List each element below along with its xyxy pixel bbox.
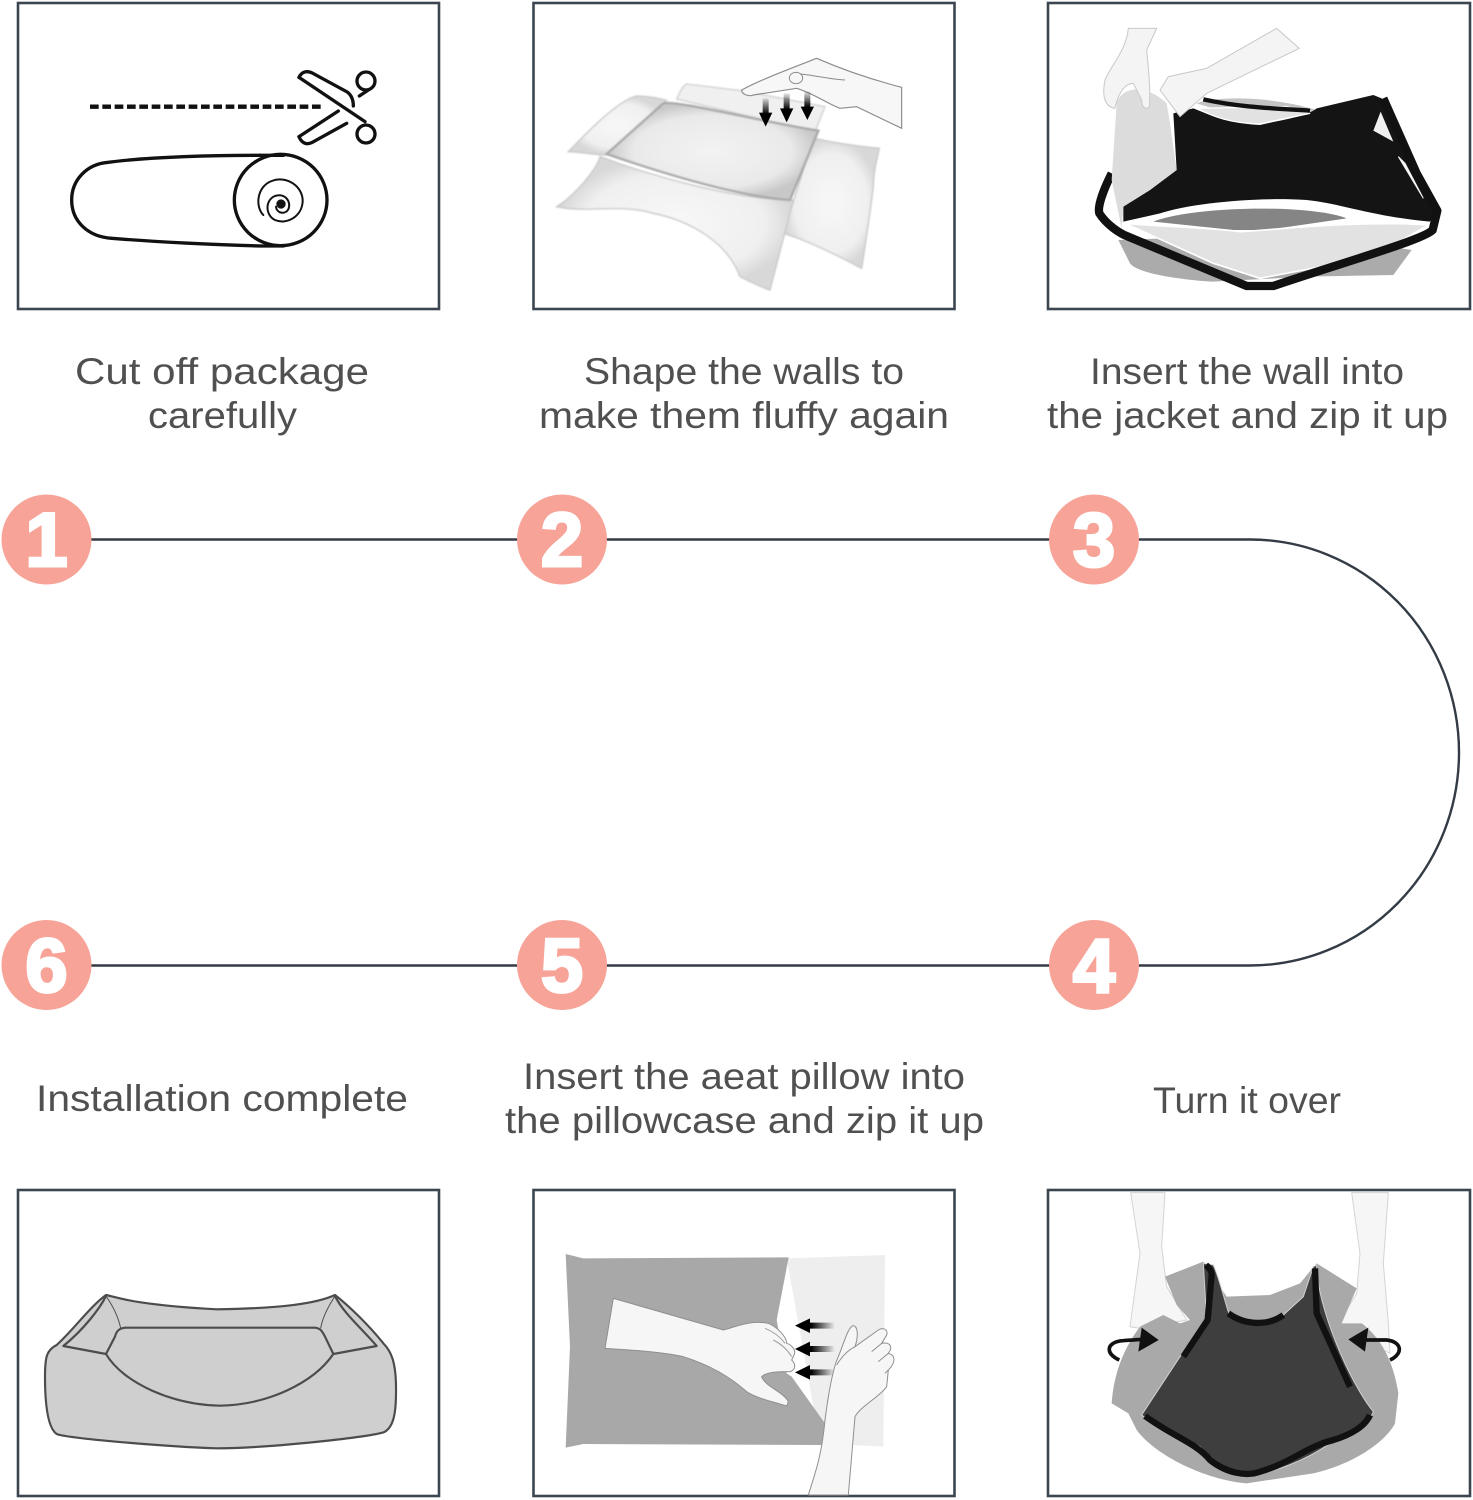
panel: step 6 finished bed	[18, 1190, 439, 1496]
caption: step 1: Cut off package	[75, 351, 369, 392]
illustration: jacket with wall and hands	[1099, 28, 1437, 286]
illustration: pillow and hands	[566, 1254, 894, 1495]
illustration: turning the cover	[1109, 1193, 1399, 1483]
panel: step 4 turn over	[1048, 1190, 1470, 1496]
caption: step 4: Turn it over	[1153, 1080, 1341, 1121]
icon: hand	[742, 58, 902, 128]
step marker 5	[517, 920, 607, 1010]
step marker 6	[2, 920, 92, 1010]
caption: step 3	[1047, 351, 1448, 436]
panel: step 3 insert wall	[1048, 3, 1470, 309]
step marker 4	[1049, 920, 1139, 1010]
icon: scissors and dashed cut line	[90, 72, 375, 144]
caption: step 2: Shape the walls to	[584, 351, 904, 392]
wall panel	[1112, 90, 1177, 228]
icon: hands	[1104, 28, 1299, 117]
icon: arrows	[795, 1318, 835, 1380]
caption: step 3: Insert the wall into	[1090, 351, 1404, 392]
caption: step 2: make them fluffy again	[539, 395, 949, 436]
step marker 2: 2	[541, 498, 583, 583]
icon: second hand	[808, 1326, 894, 1495]
step marker 5: 5	[541, 924, 583, 1009]
step marker 2	[517, 494, 607, 584]
step marker 3	[1049, 494, 1139, 584]
step marker 1: 1	[25, 498, 68, 583]
step marker 3: 3	[1073, 498, 1115, 583]
caption: step 5: the pillowcase and zip it up	[505, 1100, 984, 1141]
icon: down arrows	[759, 92, 814, 127]
caption: step 5: Insert the aeat pillow into	[523, 1056, 965, 1097]
illustration: pillows and hand	[557, 58, 902, 290]
panel: step 2 shape walls	[534, 3, 954, 309]
caption: step 6: Installation complete	[36, 1078, 408, 1119]
step marker 6: 6	[25, 924, 68, 1009]
icon: curved arrows	[1109, 1328, 1399, 1360]
caption: step 1	[75, 351, 369, 436]
caption: step 2	[539, 351, 949, 436]
step marker 4: 4	[1073, 924, 1115, 1009]
step marker 1	[2, 494, 92, 584]
timeline path connecting the steps	[46, 540, 1459, 966]
caption: step 3: the jacket and zip it up	[1047, 395, 1448, 436]
caption: step 1: carefully	[148, 395, 298, 436]
icon: inserting hand	[605, 1298, 795, 1406]
icon: rolled bed	[72, 154, 327, 246]
illustration: bed	[45, 1295, 396, 1448]
caption: step 5	[505, 1056, 984, 1141]
panel: step 5 seat pillow	[534, 1190, 954, 1496]
panel: step 1 cut package	[18, 3, 439, 309]
